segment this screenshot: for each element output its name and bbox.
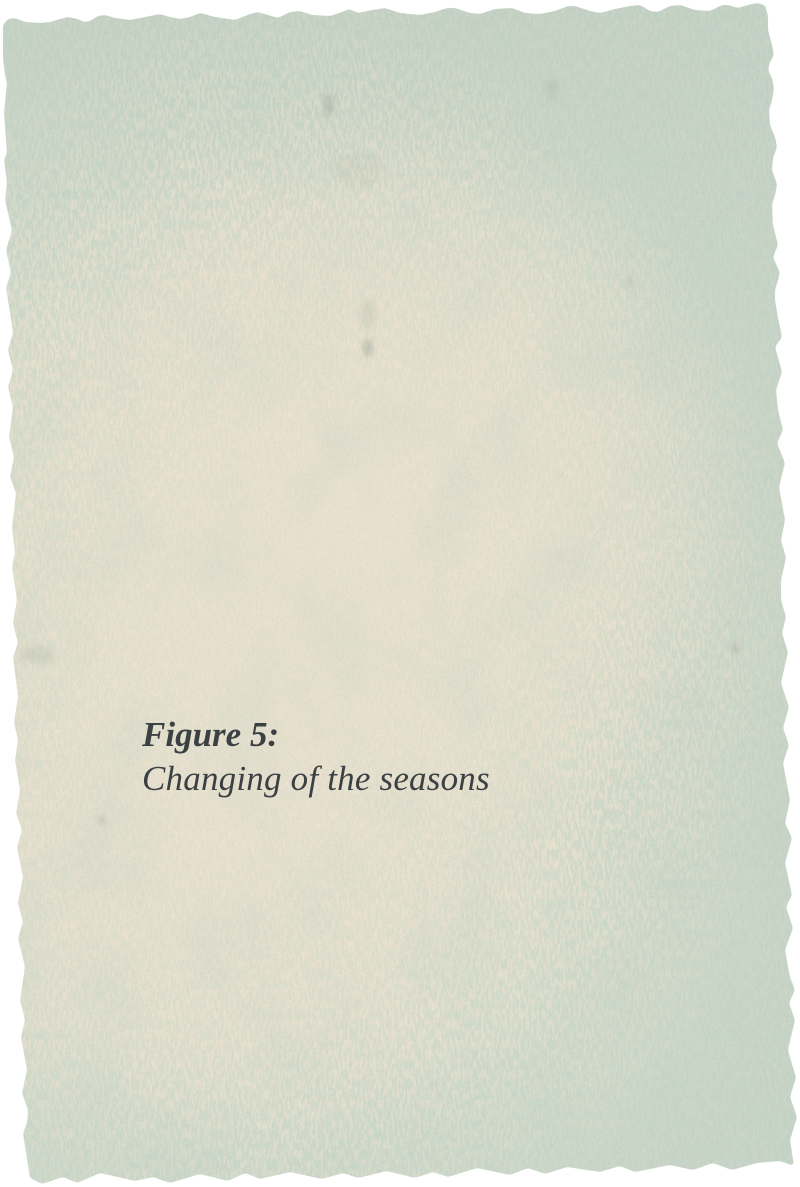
heading: figure number: Figure 5: — [142, 715, 279, 754]
caption block — [142, 715, 490, 798]
subtitle: figure title: Changing of the seasons — [142, 759, 490, 798]
